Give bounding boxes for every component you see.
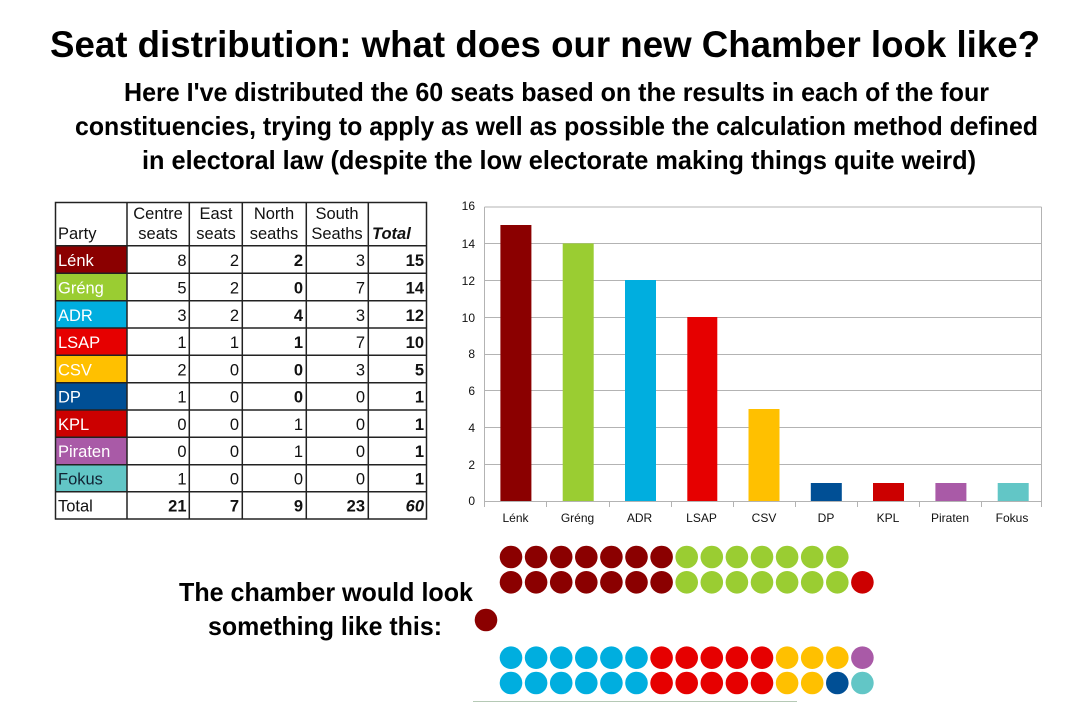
row: Gréng: 14 — [406, 280, 425, 298]
row: ADR: 2 — [230, 307, 239, 325]
bar chart: seats by party — [462, 199, 1042, 525]
row: KPL: 0 — [230, 416, 239, 434]
table header: Party — [58, 225, 97, 243]
row: Total: Total — [58, 498, 93, 516]
x axis labels: DP — [818, 511, 834, 525]
row: KPL: 0 — [356, 416, 365, 434]
chamber caption — [179, 577, 474, 641]
panel: seats table — [56, 202, 426, 519]
row: KPL: 1 — [294, 416, 303, 434]
seats: Lénk — [475, 546, 673, 631]
row: Total: 21 — [168, 498, 186, 516]
row: CSV — [58, 362, 424, 380]
row: Gréng: 0 — [294, 280, 303, 298]
row: Piraten: 0 — [230, 443, 239, 461]
row: LSAP: 1 — [177, 334, 186, 352]
y axis labels: 16 — [462, 199, 475, 213]
y axis labels: 0 — [468, 494, 475, 508]
row: Piraten: 1 — [415, 443, 424, 461]
intro text block: in electoral law (despite the low electorate making things quite weird) — [142, 145, 976, 175]
x axis labels: ADR — [627, 511, 652, 525]
row: LSAP — [58, 334, 424, 352]
row: ADR: ADR — [58, 307, 93, 325]
row: Piraten: 0 — [177, 443, 186, 461]
row: Fokus: 1 — [415, 470, 424, 488]
row: Total: 9 — [294, 498, 303, 516]
row: DP: 0 — [294, 388, 303, 406]
row: Gréng — [58, 280, 425, 298]
row: LSAP: 7 — [356, 334, 365, 352]
row: Total: 60 — [406, 498, 425, 516]
row: Lénk: Lénk — [58, 252, 95, 270]
seat: Fokus — [851, 672, 874, 694]
row: ADR: 3 — [356, 307, 365, 325]
seats: CSV — [776, 646, 849, 694]
x axis labels: CSV — [752, 511, 776, 525]
row: Fokus: Fokus — [58, 470, 103, 488]
row: KPL — [58, 416, 424, 434]
row: Piraten: Piraten — [58, 443, 110, 461]
chamber caption: something like this: — [208, 611, 442, 641]
row: Piraten: 1 — [294, 443, 303, 461]
row: KPL: KPL — [58, 416, 89, 434]
row: CSV: 0 — [294, 362, 303, 380]
table header — [58, 205, 411, 243]
row: ADR: 12 — [406, 307, 424, 325]
table header: seats — [196, 225, 236, 243]
x axis labels: Gréng — [561, 511, 594, 525]
y axis labels — [462, 199, 475, 508]
y axis labels: 2 — [468, 458, 475, 472]
y axis labels: 14 — [462, 237, 475, 251]
row: DP: 1 — [415, 388, 424, 406]
bars — [500, 225, 1029, 501]
row: CSV: 3 — [356, 362, 365, 380]
row: CSV: CSV — [58, 362, 92, 380]
row: DP: 0 — [230, 388, 239, 406]
row: Fokus: 0 — [356, 470, 365, 488]
row: DP: 0 — [356, 388, 365, 406]
table header: North — [254, 205, 294, 223]
x axis labels: LSAP — [686, 511, 717, 525]
row: CSV: 5 — [415, 362, 424, 380]
row: Lénk: 8 — [177, 252, 186, 270]
y axis labels: 4 — [468, 421, 475, 435]
table header: Seaths — [311, 225, 363, 243]
row: Gréng: 7 — [356, 280, 365, 298]
seats: Gréng — [675, 546, 849, 594]
table header: seats — [138, 225, 178, 243]
row: LSAP: 10 — [406, 334, 424, 352]
table header: East — [199, 205, 233, 223]
x axis labels: Piraten — [931, 511, 969, 525]
row: Gréng: Gréng — [58, 280, 104, 298]
row: Lénk: 2 — [230, 252, 239, 270]
row: Lénk — [58, 252, 424, 270]
row: Total: 23 — [347, 498, 365, 516]
row: ADR: 3 — [177, 307, 186, 325]
row: DP — [58, 388, 424, 406]
y axis labels: 12 — [462, 274, 475, 288]
table header: Centre — [133, 205, 183, 223]
table header: seaths — [250, 225, 298, 243]
party colour cells — [56, 246, 127, 492]
row: Total: 7 — [230, 498, 239, 516]
row: Lénk: 15 — [406, 252, 424, 270]
intro text block: Here I've distributed the 60 seats based on the results in each of the four — [124, 77, 989, 107]
row: Fokus: 0 — [230, 470, 239, 488]
seats: ADR — [500, 646, 648, 694]
row: Total — [58, 498, 425, 516]
row: Gréng: 5 — [177, 280, 186, 298]
x axis labels: KPL — [877, 511, 900, 525]
row: Piraten: 0 — [356, 443, 365, 461]
title: Seat distribution: what does our new Chamber look like? — [50, 24, 1040, 65]
y axis labels: 6 — [468, 384, 475, 398]
row: LSAP: 1 — [294, 334, 303, 352]
row: Fokus: 0 — [294, 470, 303, 488]
x axis labels: Fokus — [996, 511, 1028, 525]
x axis labels: Lénk — [502, 511, 530, 525]
row: DP: DP — [58, 388, 81, 406]
intro text block: constituencies, trying to apply as well as possible the calculation method defined — [75, 111, 1038, 141]
row: Gréng: 2 — [230, 280, 239, 298]
chamber caption: The chamber would look — [179, 577, 474, 607]
chamber seat diagram — [475, 546, 874, 694]
row: Piraten — [58, 443, 424, 461]
y axis labels: 8 — [468, 347, 475, 361]
x axis labels — [502, 511, 1028, 525]
row: KPL: 0 — [177, 416, 186, 434]
row: LSAP: 1 — [230, 334, 239, 352]
row: ADR: 4 — [294, 307, 304, 325]
seat: Piraten — [851, 646, 874, 669]
row: Fokus — [58, 470, 424, 488]
y axis labels: 10 — [462, 311, 475, 325]
table header: Total — [372, 225, 411, 243]
seat: DP — [826, 672, 849, 694]
seats: LSAP — [650, 646, 773, 694]
table header: South — [315, 205, 359, 223]
row: DP: 1 — [177, 388, 186, 406]
row: LSAP: LSAP — [58, 334, 100, 352]
row: Fokus: 1 — [177, 470, 186, 488]
row: CSV: 2 — [177, 362, 186, 380]
row: KPL: 1 — [415, 416, 424, 434]
row: Lénk: 2 — [294, 252, 303, 270]
row: Lénk: 3 — [356, 252, 365, 270]
row: ADR — [58, 307, 424, 325]
seat: KPL — [851, 571, 874, 594]
row: CSV: 0 — [230, 362, 239, 380]
intro text block — [75, 77, 1038, 175]
